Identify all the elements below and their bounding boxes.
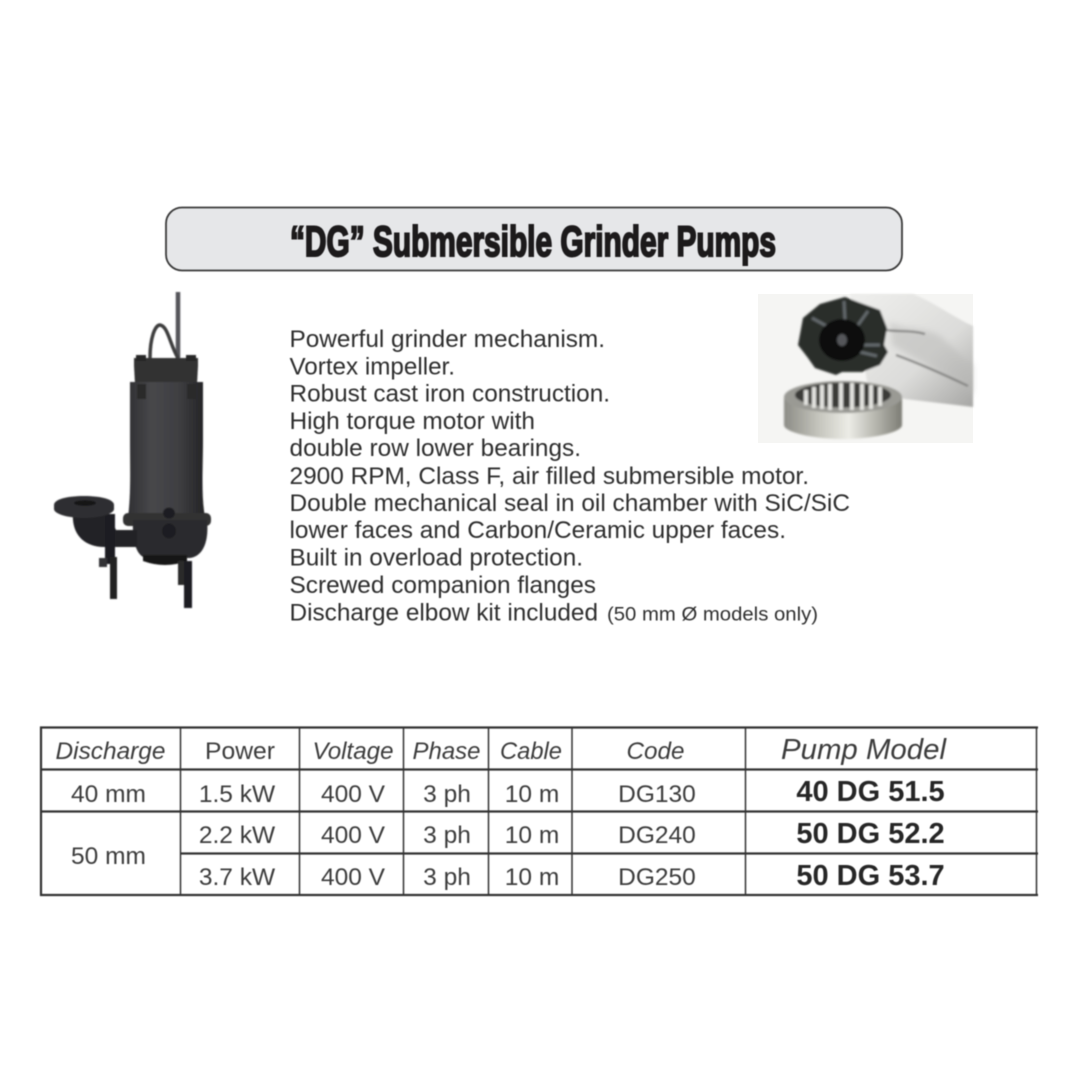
feature list: Double mechanical seal in oil chamber with SiC/SiC: [290, 490, 850, 517]
hand: [850, 294, 973, 407]
bearing ring: [784, 397, 902, 439]
row: 2.2 kW: 3 ph: [423, 822, 471, 849]
feature list: lower faces and Carbon/Ceramic upper faces.: [290, 517, 786, 544]
feature list: Robust cast iron construction.: [290, 380, 610, 408]
row: 40 mm: 3 ph: [423, 781, 471, 808]
feature list: Powerful grinder mechanism.: [290, 326, 605, 353]
row: 50 mm label: 50 mm: [71, 843, 146, 870]
power cable: [176, 292, 180, 358]
row: 3.7 kW: DG250: [618, 864, 696, 891]
discharge flange: [54, 496, 114, 518]
row: 40 mm: 40 mm: [71, 781, 146, 808]
table header: Code: [626, 738, 684, 765]
row: 40 mm: DG130: [618, 781, 696, 808]
legs: [110, 557, 117, 599]
specification table: [41, 727, 1038, 895]
table header: Voltage: [312, 738, 394, 765]
lower casing: [123, 513, 211, 526]
table grid: [41, 727, 1038, 895]
feature list: Built in overload protection.: [290, 544, 583, 572]
row: 40 mm: 40 DG 51.5: [796, 776, 945, 808]
row: 3.7 kW: 400 V: [321, 864, 386, 891]
motor body: [128, 382, 205, 517]
feature list: double row lower bearings.: [290, 435, 581, 462]
table header: Discharge: [56, 738, 166, 765]
table header: Pump Model: [781, 734, 947, 766]
table header: Phase: [412, 738, 480, 765]
icon: submersible pump photo: [54, 292, 211, 608]
impeller: [798, 297, 888, 375]
feature list: (50 mm Ø models only): [607, 604, 818, 626]
row: 2.2 kW: DG240: [618, 822, 696, 849]
table header: Cable: [500, 738, 562, 765]
row: 3.7 kW: [199, 860, 945, 892]
table header: Power: [205, 738, 275, 765]
discharge elbow: [73, 512, 137, 547]
row: 2.2 kW: 50 DG 52.2: [796, 818, 945, 850]
feature list: Screwed companion flanges: [290, 572, 596, 599]
feature list: [290, 326, 850, 626]
table header: [56, 734, 947, 766]
row: 2.2 kW: 10 m: [505, 822, 559, 849]
row: 40 mm: [71, 776, 945, 808]
motor head: [134, 358, 198, 384]
row: 40 mm: 1.5 kW: [199, 781, 276, 808]
title: “DG” Submersible Grinder Pumps: [290, 218, 776, 266]
row: 40 mm: 10 m: [505, 781, 559, 808]
row: 40 mm: 400 V: [321, 781, 386, 808]
feature list: 2900 RPM, Class F, air filled submersible motor.: [290, 463, 809, 490]
title banner: [166, 208, 902, 270]
feature list: High torque motor with: [290, 408, 535, 435]
feature list: Discharge elbow kit included: [290, 600, 598, 626]
row: 2.2 kW: 2.2 kW: [199, 822, 276, 849]
row: 3.7 kW: 50 DG 53.7: [796, 860, 945, 892]
photo: impeller and bearing in hand: [758, 294, 973, 443]
row: 3.7 kW: 3.7 kW: [199, 864, 276, 891]
feature list: Vortex impeller.: [290, 354, 455, 380]
row: 3.7 kW: 10 m: [505, 864, 559, 891]
row: 3.7 kW: 3 ph: [423, 864, 471, 891]
row: 2.2 kW: [199, 818, 945, 850]
row: 2.2 kW: 400 V: [321, 822, 386, 849]
